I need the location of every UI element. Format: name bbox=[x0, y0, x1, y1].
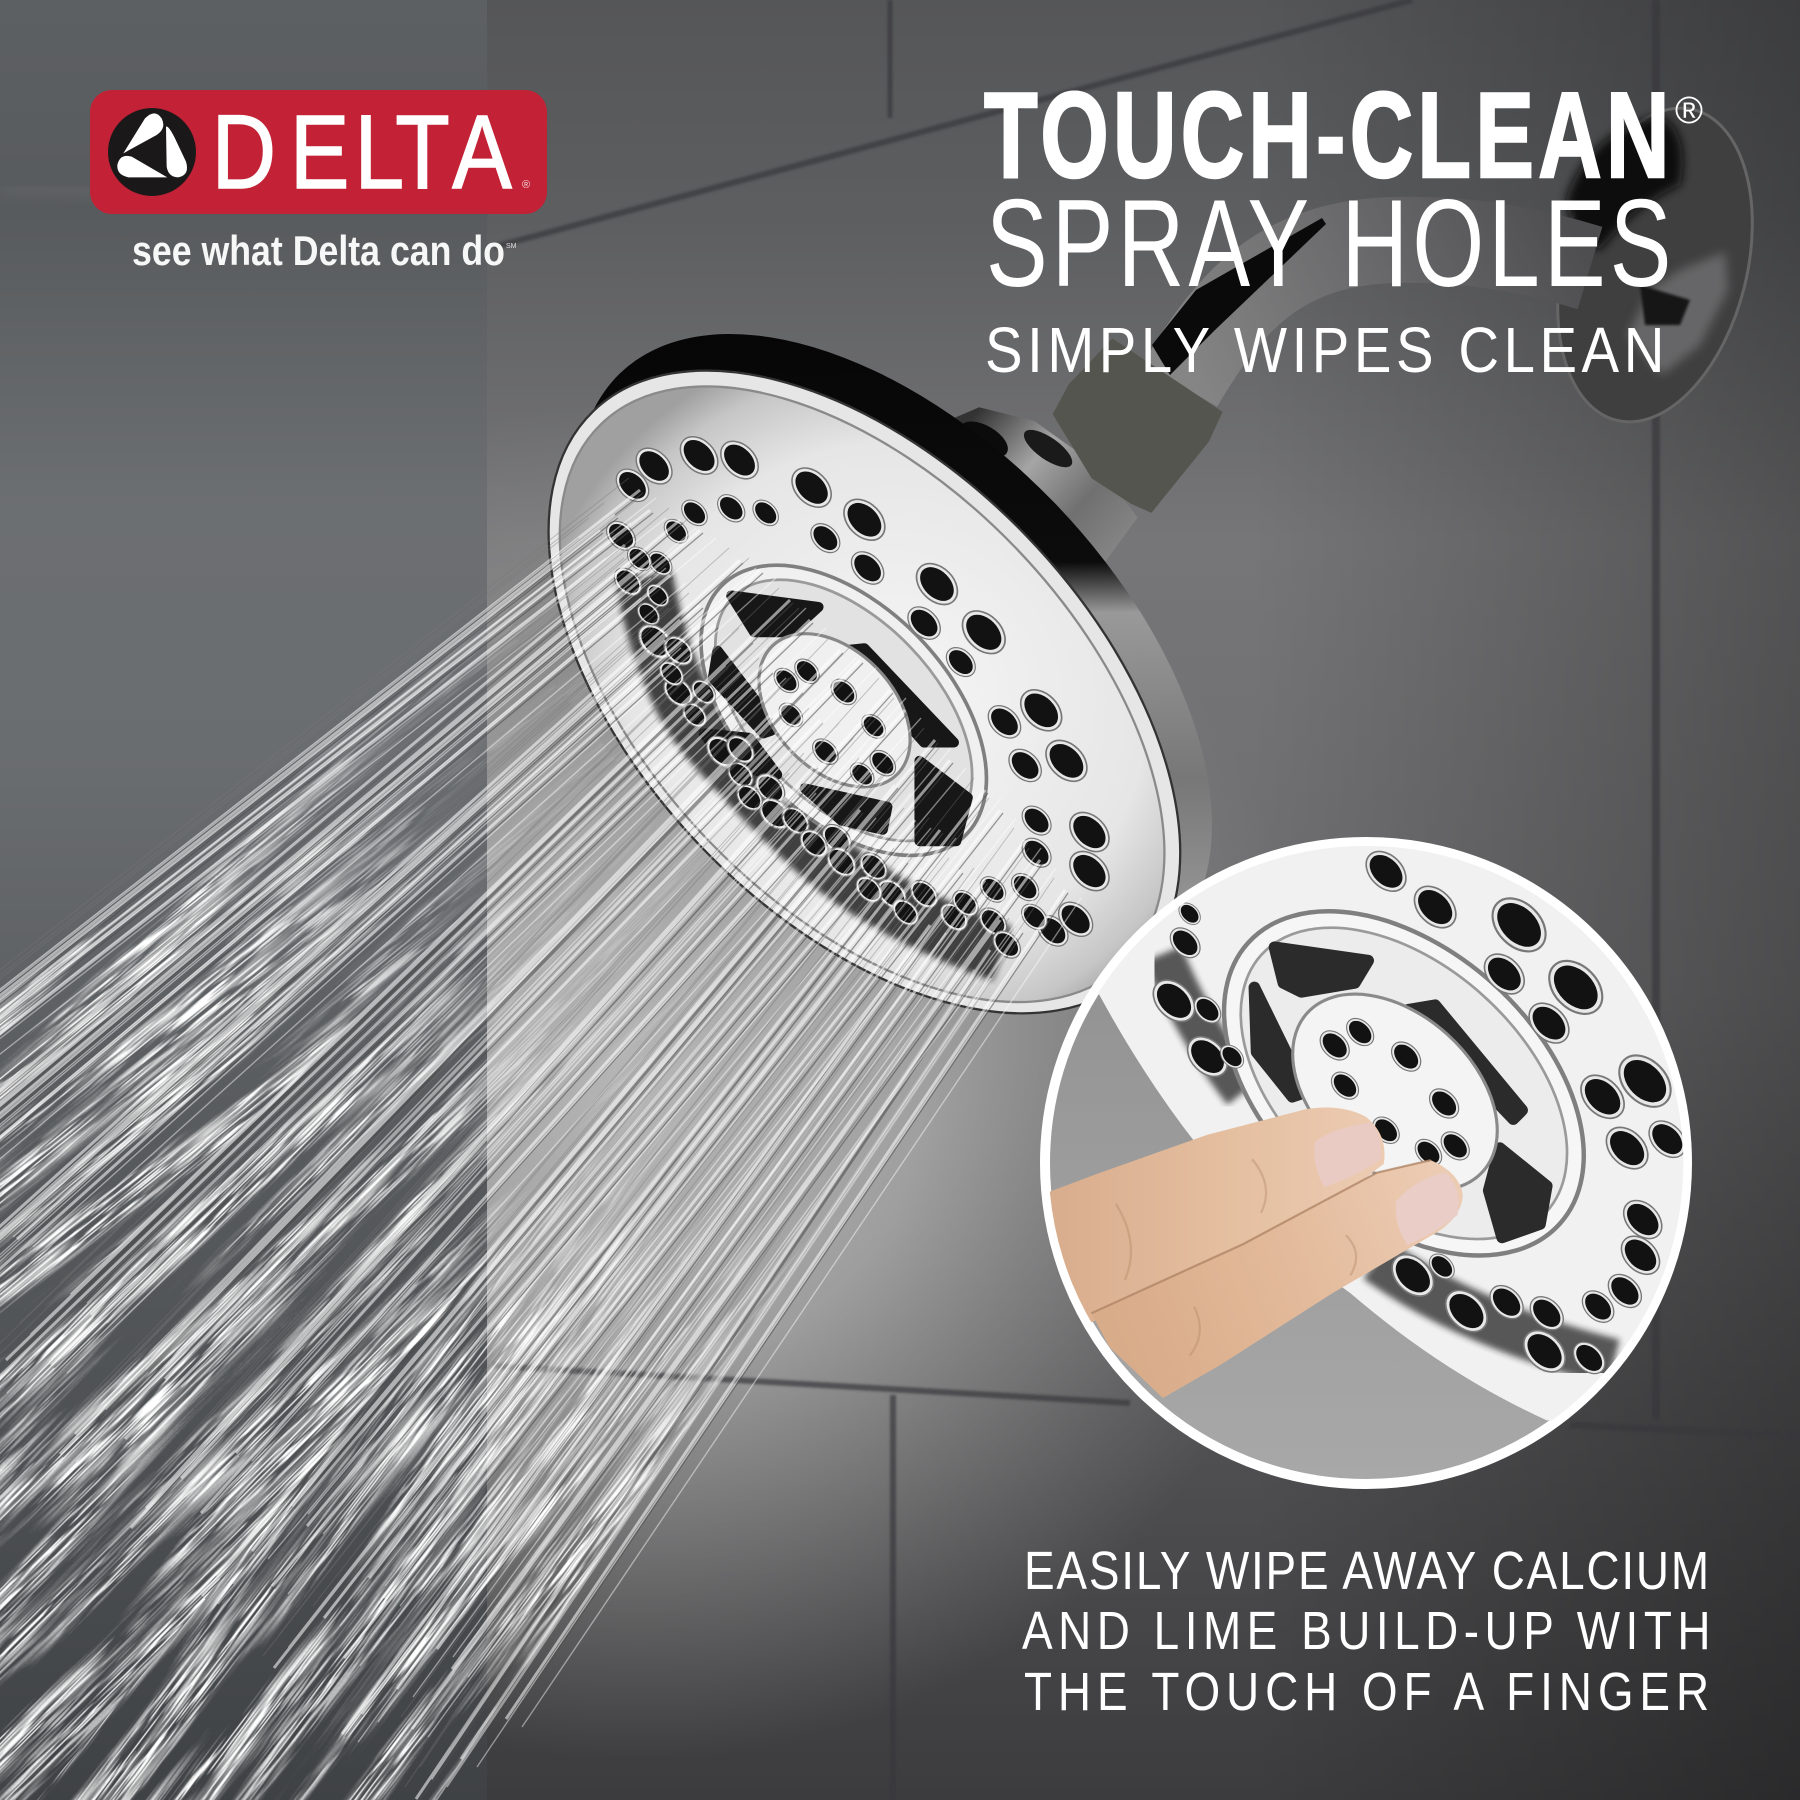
registered mark: ® bbox=[522, 179, 530, 191]
subtitle: SIMPLY WIPES CLEAN bbox=[985, 314, 1664, 386]
inset head chrome face bbox=[1098, 846, 1684, 1420]
spray face bbox=[558, 385, 1166, 1004]
line 2: AND LIME BUILD-UP WITH bbox=[1022, 1601, 1711, 1661]
line 3: THE TOUCH OF A FINGER bbox=[1024, 1662, 1709, 1722]
shower head bbox=[547, 334, 1222, 1014]
service mark: SM bbox=[506, 243, 517, 250]
upper finger bbox=[1047, 1108, 1385, 1322]
logo: Delta bbox=[90, 90, 547, 274]
logo red badge bbox=[90, 90, 547, 214]
body text bbox=[1022, 1541, 1710, 1722]
heading bbox=[984, 67, 1703, 386]
dark centre segments bbox=[704, 596, 968, 841]
title: Touch-Clean: TOUCH-CLEAN bbox=[984, 67, 1669, 203]
centre disc bbox=[729, 604, 940, 816]
dark lower nozzle band bbox=[644, 577, 1002, 954]
icon: Delta triangle mark bbox=[108, 108, 196, 196]
centre ring bbox=[647, 512, 1040, 909]
spray nozzles bbox=[601, 429, 1117, 963]
inset centre disc bbox=[1291, 992, 1499, 1188]
inset centre ring bbox=[1222, 909, 1586, 1258]
neck and ball joint bbox=[915, 338, 1223, 600]
inset dark segments bbox=[1254, 947, 1547, 1237]
lower finger bbox=[1091, 1160, 1463, 1398]
registered mark: ® bbox=[1675, 90, 1703, 132]
inset dark lower nozzle band bbox=[1377, 1260, 1614, 1362]
chrome rim bbox=[431, 255, 1297, 1129]
shower arm and wall flange bbox=[1152, 87, 1783, 443]
head barrel bbox=[460, 219, 1329, 1096]
title: Spray Holes: SPRAY HOLES bbox=[986, 175, 1671, 313]
icon: wall flange bbox=[1527, 87, 1783, 443]
inset: finger wiping spray holes bbox=[1045, 820, 1734, 1484]
inset white ring bbox=[1045, 842, 1687, 1484]
water jets bbox=[0, 478, 1081, 1800]
spray mist texture bbox=[0, 590, 885, 1800]
inset nozzles bbox=[1145, 844, 1693, 1380]
tagline: see what Delta can do bbox=[132, 227, 505, 274]
logo wordmark: DELTA bbox=[212, 93, 512, 211]
shower arm pipe bbox=[1152, 218, 1590, 385]
line 1: EASILY WIPE AWAY CALCIUM bbox=[1024, 1541, 1709, 1601]
